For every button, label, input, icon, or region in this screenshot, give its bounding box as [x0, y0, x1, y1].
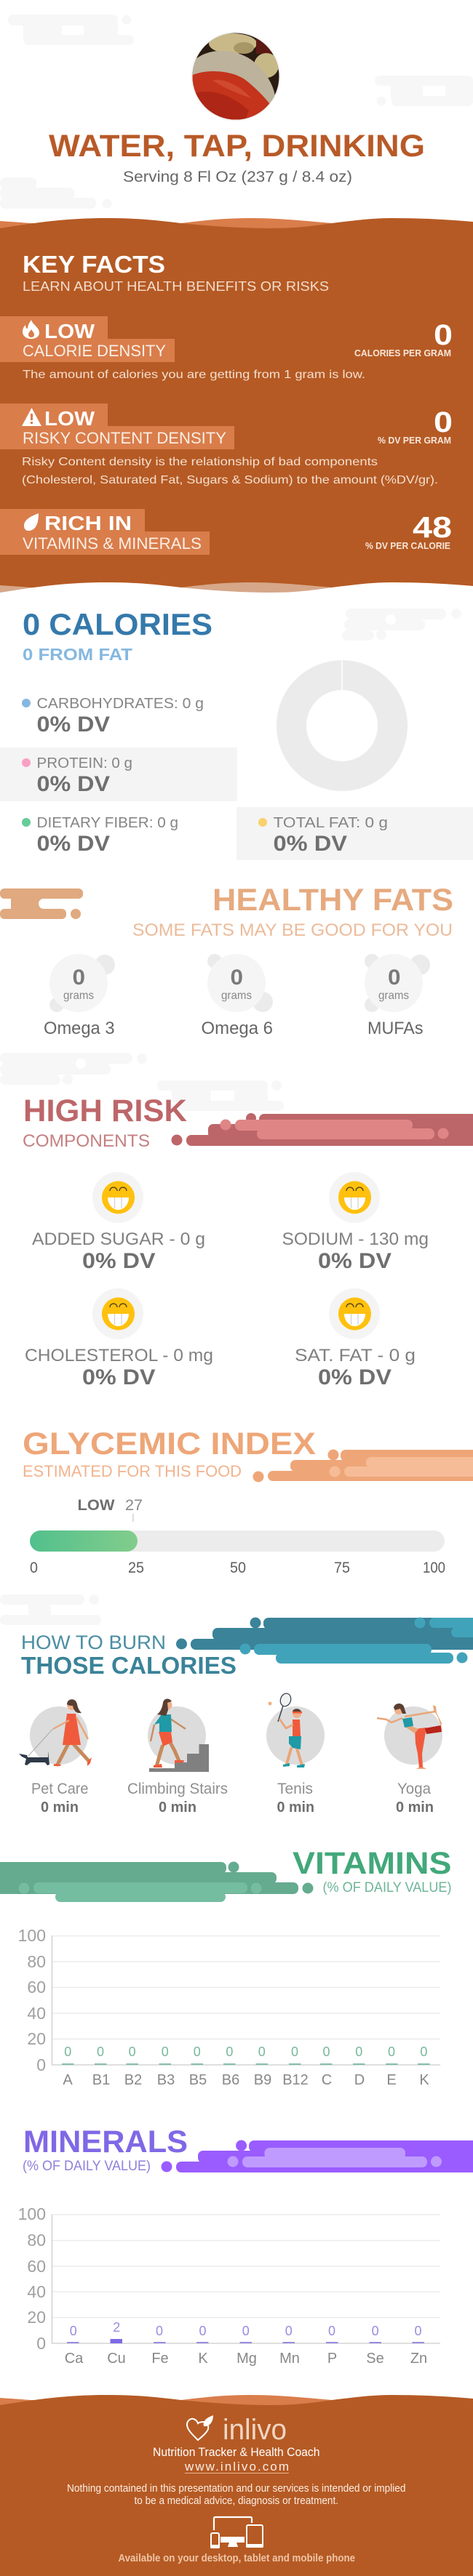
legend: dietary fiber: DIETARY FIBER: 0 g — [36, 815, 178, 831]
fact: risky content density: Risky Content density is the relationship of bad components — [22, 456, 378, 468]
icon: grinning face — [102, 1181, 135, 1214]
fact: calorie density: 0 — [434, 319, 453, 351]
fact: rich in vitamins and minerals: VITAMINS & MINERALS — [23, 534, 202, 553]
stat: omega 3: grams — [63, 990, 94, 1002]
fact: calorie density — [0, 316, 453, 381]
ribbon: glycemic — [253, 1450, 473, 1482]
panel: how to burn calories — [19, 1617, 473, 1815]
activity: climbing stairs: Climbing Stairs — [127, 1781, 228, 1797]
gauge scale: 0 — [30, 1560, 38, 1576]
disclaimer — [67, 2483, 406, 2507]
activity: yoga — [377, 1704, 442, 1815]
activity: pet care — [19, 1699, 92, 1815]
bar chart: minerals: 0 — [372, 2324, 379, 2338]
gauge value — [77, 1497, 143, 1522]
panel: calories — [0, 607, 473, 860]
bar chart: minerals: 20 — [27, 2308, 46, 2327]
bar chart: vitamins: 0 — [420, 2045, 427, 2059]
title: WATER, TAP, DRINKING — [49, 129, 425, 164]
icon: grinning face — [338, 1297, 371, 1331]
item: added sugar: 0% DV — [82, 1249, 156, 1273]
availability note: Available on your desktop, tablet and mobile phone — [118, 2552, 355, 2564]
activity: pet care: 0 min — [41, 1799, 79, 1815]
subheading: daily value: (% OF DAILY VALUE) — [23, 2159, 151, 2174]
bar chart: minerals: 40 — [27, 2282, 46, 2301]
legend: carbohydrates: 0% DV — [36, 713, 110, 737]
fact: rich in vitamins and minerals: % DV PER CALORIE — [365, 540, 450, 551]
donut chart — [291, 659, 393, 777]
bar chart: vitamins: 60 — [27, 1978, 46, 1997]
bar chart: vitamins: 0 — [322, 2045, 330, 2059]
item: cholesterol: 0% DV — [82, 1365, 156, 1389]
figure: woman walking dog — [19, 1699, 92, 1766]
fact: risky content density — [0, 404, 453, 486]
bar chart: vitamins: C — [322, 2072, 332, 2088]
bar chart: vitamins: 0 — [355, 2045, 362, 2059]
food photo — [191, 32, 281, 124]
bar chart: vitamins: 0 — [97, 2045, 104, 2059]
fact: risky content density: % DV PER GRAM — [378, 435, 451, 446]
fact: risky content density: (Cholesterol, Saturated Fat, Sugars & Sodium) to the amount (%DV/gr). — [22, 474, 438, 486]
bar chart: vitamins: 0 — [291, 2045, 298, 2059]
panel: healthy fats — [0, 883, 453, 1038]
legend: protein — [22, 755, 132, 796]
bar chart: vitamins: B5 — [189, 2072, 207, 2088]
fact: rich in vitamins and minerals — [0, 509, 452, 555]
gauge scale: 75 — [334, 1560, 350, 1576]
bar chart: vitamins: 80 — [27, 1952, 46, 1971]
bar chart: minerals: Cu — [107, 2351, 126, 2367]
bar chart: minerals: 0 — [328, 2324, 335, 2338]
bar chart: vitamins: 40 — [27, 2004, 46, 2023]
fact: calorie density: The amount of calories you are getting from 1 gram is low. — [23, 369, 365, 381]
item: cholesterol: CHOLESTEROL - 0 mg — [25, 1346, 213, 1365]
item: sodium: 0% DV — [318, 1249, 391, 1273]
icon: flame — [23, 320, 39, 339]
subheading: ESTIMATED FOR THIS FOOD — [23, 1462, 242, 1480]
disclaimer: Nothing contained in this presentation and our services is intended or implied — [67, 2483, 406, 2495]
activity: climbing stairs: 0 min — [159, 1799, 196, 1815]
heading: calories: 0 CALORIES — [23, 607, 212, 641]
fact: calorie density: CALORIES PER GRAM — [354, 348, 451, 358]
bar chart: vitamins: 0 — [129, 2045, 136, 2059]
bar chart: vitamins: 0 — [36, 2055, 46, 2074]
disclaimer: to be a medical advice, diagnosis or treatment. — [134, 2495, 338, 2507]
heading: how to burn: HOW TO BURN — [21, 1632, 166, 1653]
fact: risky content density: LOW — [44, 407, 95, 430]
bar chart: minerals: Mg — [236, 2351, 257, 2367]
heading: healthy fats: HEALTHY FATS — [212, 883, 453, 918]
figure: tennis player — [268, 1692, 305, 1768]
stat: omega 3: Omega 3 — [44, 1019, 115, 1038]
bar chart: minerals: 0 — [199, 2324, 207, 2338]
ribbon: minerals — [162, 2140, 473, 2172]
legend: protein: PROTEIN: 0 g — [36, 755, 132, 771]
subheading: SOME FATS MAY BE GOOD FOR YOU — [132, 920, 453, 940]
bar chart: minerals: Fe — [151, 2351, 169, 2367]
fact: calorie density: LOW — [44, 320, 95, 342]
ribbon: vitamins — [0, 1861, 313, 1902]
item: saturated fat: SAT. FAT - 0 g — [295, 1346, 416, 1365]
icon: grinning face — [338, 1181, 371, 1214]
bar chart: vitamins — [18, 1926, 440, 2088]
bar chart: minerals — [18, 2204, 440, 2367]
bar chart: vitamins: E — [386, 2072, 397, 2088]
fact: risky content density: 0 — [434, 406, 453, 438]
item: added sugar — [32, 1172, 205, 1273]
bar chart: vitamins: 0 — [226, 2045, 233, 2059]
activity: pet care: Pet Care — [31, 1781, 89, 1797]
bar chart: minerals: 100 — [18, 2204, 46, 2223]
bar chart: minerals: 60 — [27, 2257, 46, 2276]
bar chart: minerals: 80 — [27, 2231, 46, 2250]
heading: minerals: MINERALS — [23, 2124, 188, 2159]
subheading: LEARN ABOUT HEALTH BENEFITS OR RISKS — [23, 278, 329, 294]
figure: woman on stairs — [149, 1698, 209, 1772]
stat: mufas: 0 — [388, 966, 400, 990]
bar chart: minerals: P — [327, 2351, 337, 2367]
website link: www.inlivo.com — [184, 2460, 289, 2473]
item: sodium — [282, 1172, 429, 1273]
icon: leaf — [24, 513, 39, 531]
gauge value: 27 — [125, 1497, 143, 1514]
icon: warning triangle — [22, 408, 41, 426]
stat: omega 3 — [44, 954, 115, 1038]
bar chart: vitamins: 0 — [64, 2045, 71, 2059]
gauge value: LOW — [77, 1497, 115, 1514]
bar chart: minerals: Se — [366, 2351, 384, 2367]
subheading: daily value: (% OF DAILY VALUE) — [323, 1880, 451, 1895]
legend: total fat — [258, 815, 388, 856]
bar chart: vitamins: 0 — [194, 2045, 201, 2059]
legend: total fat: TOTAL FAT: 0 g — [274, 815, 388, 831]
fact: rich in vitamins and minerals: RICH IN — [44, 512, 132, 534]
logo: inlivo: inlivo — [223, 2414, 287, 2446]
item: added sugar: ADDED SUGAR - 0 g — [32, 1229, 205, 1249]
legend: dietary fiber — [22, 815, 178, 856]
bar chart: minerals: K — [198, 2351, 208, 2367]
bar chart: vitamins: D — [354, 2072, 365, 2088]
legend: dietary fiber: 0% DV — [36, 832, 110, 856]
bar chart: minerals: Zn — [410, 2351, 427, 2367]
item: sodium: SODIUM - 130 mg — [282, 1229, 429, 1249]
item: saturated fat — [295, 1288, 416, 1389]
gauge scale: 100 — [423, 1560, 445, 1576]
activity: yoga: 0 min — [396, 1799, 434, 1815]
serving size: Serving 8 Fl Oz (237 g / 8.4 oz) — [123, 169, 352, 185]
bar chart: minerals: 0 — [242, 2324, 250, 2338]
bar chart: minerals: 0 — [70, 2324, 77, 2338]
stat: mufas: MUFAs — [367, 1019, 424, 1038]
fact: risky content density: RISKY CONTENT DENSITY — [23, 429, 226, 447]
logo: inlivo — [187, 2414, 287, 2446]
stat: omega 6 — [201, 954, 273, 1038]
icon: devices — [210, 2517, 263, 2548]
bar chart: vitamins: B6 — [222, 2072, 239, 2088]
subheading: from fat: 0 FROM FAT — [23, 645, 132, 664]
panel: minerals — [18, 2124, 473, 2367]
bar chart: minerals: 0 — [285, 2324, 293, 2338]
activity: tennis: Tenis — [277, 1781, 313, 1797]
stat: omega 3: 0 — [73, 966, 85, 990]
bar chart: vitamins: K — [419, 2072, 429, 2088]
stat: omega 6: 0 — [230, 966, 243, 990]
item: cholesterol — [25, 1288, 213, 1389]
heading: key facts: KEY FACTS — [23, 251, 165, 278]
bar chart: vitamins: A — [63, 2072, 73, 2088]
stat: mufas — [365, 954, 430, 1038]
bar chart: vitamins: B2 — [124, 2072, 142, 2088]
activity: climbing stairs — [127, 1698, 228, 1815]
panel: glycemic index — [23, 1427, 473, 1576]
gauge scale: 25 — [128, 1560, 144, 1576]
subheading: components: COMPONENTS — [23, 1131, 150, 1151]
legend: total fat: 0% DV — [274, 832, 347, 856]
bar chart: minerals: 0 — [414, 2324, 422, 2338]
bar chart: minerals: Mn — [279, 2351, 300, 2367]
legend: carbohydrates: CARBOHYDRATES: 0 g — [36, 696, 204, 712]
activity: tennis — [266, 1692, 325, 1815]
bar chart: vitamins: B12 — [282, 2072, 309, 2088]
figure: yoga pose — [377, 1704, 442, 1769]
ribbon: high risk — [172, 1113, 473, 1146]
gauge bar — [30, 1530, 445, 1552]
activity: yoga: Yoga — [397, 1781, 431, 1797]
bar chart: minerals: Ca — [65, 2351, 84, 2367]
icon: grinning face — [102, 1297, 135, 1331]
legend: carbohydrates — [22, 696, 204, 737]
panel: vitamins — [0, 1846, 451, 2088]
fact: calorie density: CALORIE DENSITY — [23, 342, 166, 360]
bar chart: vitamins: B3 — [157, 2072, 175, 2088]
bar chart: vitamins: 20 — [27, 2029, 46, 2048]
bar chart: vitamins: B9 — [254, 2072, 271, 2088]
tagline: Nutrition Tracker & Health Coach — [153, 2445, 320, 2459]
bar chart: vitamins: 100 — [18, 1926, 46, 1945]
bar chart: vitamins: 0 — [258, 2045, 266, 2059]
bar chart: minerals: 2 — [113, 2320, 120, 2335]
stat: mufas: grams — [378, 990, 409, 1002]
bar chart: minerals: 0 — [36, 2334, 46, 2353]
item: saturated fat: 0% DV — [318, 1365, 391, 1389]
ribbon: healthy fats — [0, 888, 83, 919]
heading: glycemic index: GLYCEMIC INDEX — [23, 1427, 316, 1461]
fact: rich in vitamins and minerals: 48 — [413, 510, 452, 544]
heading: vitamins: VITAMINS — [293, 1846, 451, 1881]
stat: omega 6: grams — [221, 990, 252, 1002]
bar chart: minerals: 0 — [156, 2324, 163, 2338]
heading: those calories: THOSE CALORIES — [21, 1652, 236, 1679]
panel: key facts — [0, 218, 473, 605]
bar chart: vitamins: B1 — [92, 2072, 110, 2088]
panel: high risk components — [23, 1094, 473, 1389]
gauge scale — [30, 1560, 445, 1576]
activity: tennis: 0 min — [277, 1799, 314, 1815]
bar chart: vitamins: 0 — [388, 2045, 395, 2059]
panel: footer — [0, 2395, 473, 2576]
bar chart: vitamins: 0 — [162, 2045, 169, 2059]
ribbon: burn — [176, 1617, 473, 1664]
legend: protein: 0% DV — [36, 772, 110, 796]
heading: high risk: HIGH RISK — [23, 1094, 187, 1128]
gauge scale: 50 — [230, 1560, 246, 1576]
stat: omega 6: Omega 6 — [201, 1019, 273, 1038]
